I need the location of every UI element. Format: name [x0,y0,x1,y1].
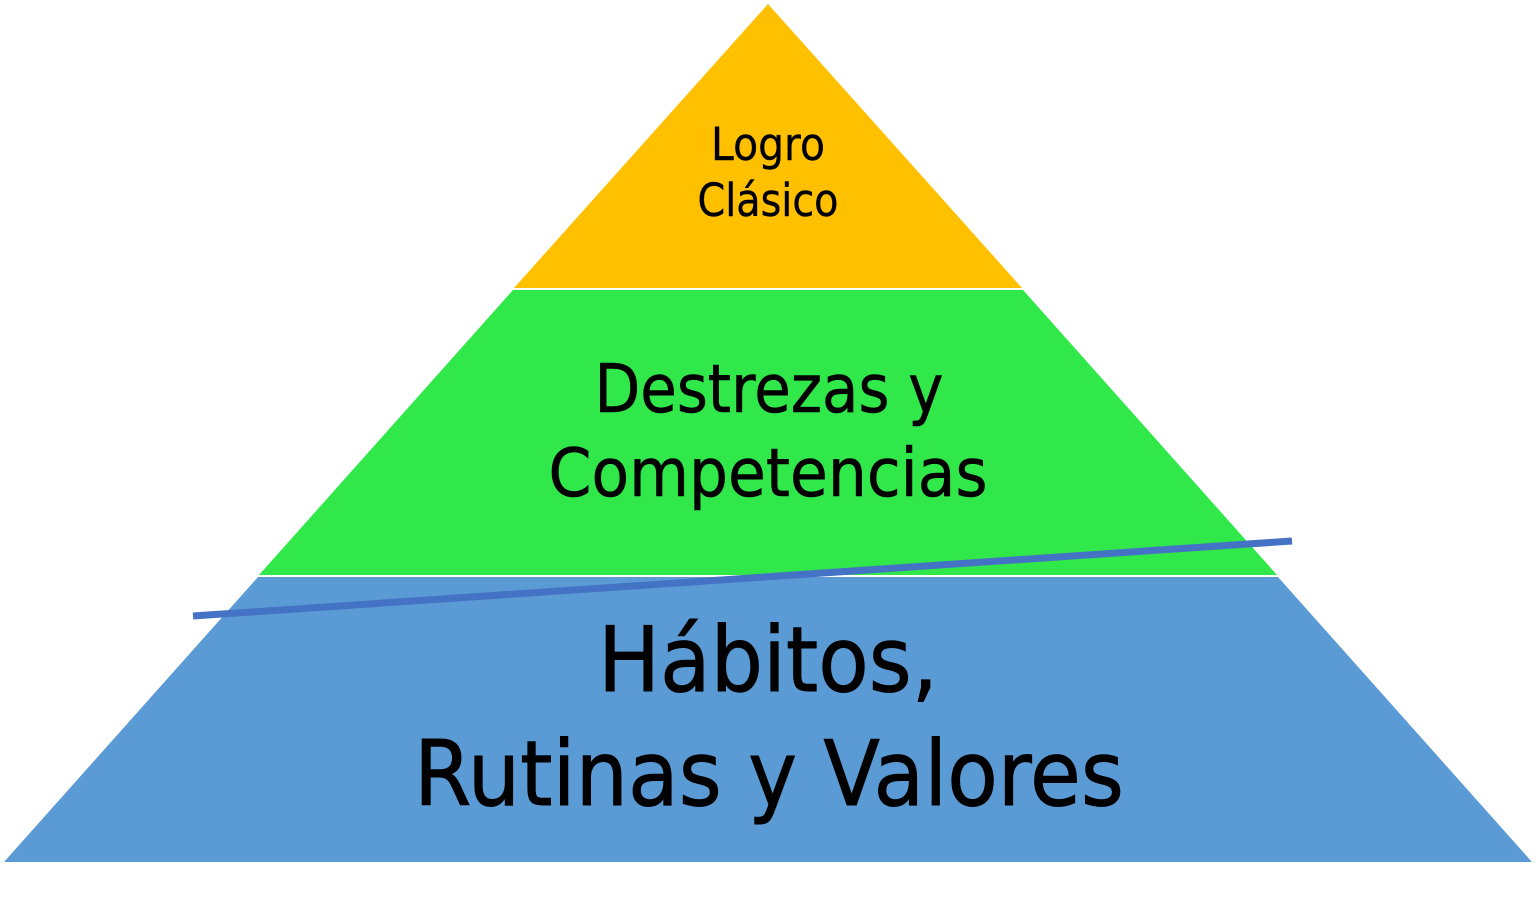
pyramid bottom tier: Hábitos, Rutinas y Valores [4,577,1532,862]
pyramid top tier: Logro Clásico [514,4,1022,288]
pyramid middle tier: Destrezas y Competencias: Competencias [548,434,988,512]
pyramid bottom tier: Hábitos, Rutinas y Valores: Rutinas y Valores [414,722,1124,827]
pyramid middle tier: Destrezas y Competencias [259,290,1277,575]
pyramid middle tier: Destrezas y Competencias: Destrezas y [594,350,944,428]
pyramid top tier: Logro Clásico: Logro [711,118,825,171]
slanted blue dividing line [193,541,1292,616]
pyramid top tier: Logro Clásico: Clásico [698,174,838,227]
pyramid bottom tier: Hábitos, Rutinas y Valores: Hábitos, [598,608,938,713]
